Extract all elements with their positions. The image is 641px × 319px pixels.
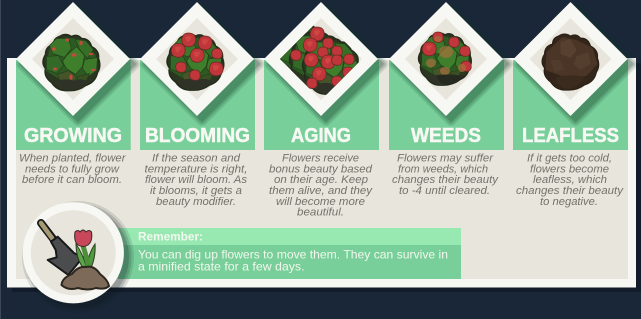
callout heading: Remember: [138,230,203,244]
card: leafless [514,2,628,208]
icon: shovel and tulip badge [23,202,124,303]
text: blooming: flower will bloom. As [145,174,248,186]
circle shadow [22,201,134,313]
diamond frame: leafless [514,2,628,116]
text: aging: beautiful. [297,207,344,219]
text: growing: When planted, flower [19,152,127,164]
panel: main card [7,58,641,292]
heading: growing: GROWING [24,125,122,147]
text: blooming: it blooms, it gets a [150,185,242,197]
text: aging: Flowers receive [282,152,359,164]
text: leafless [516,152,625,208]
heading: blooming: BLOOMING [145,125,250,147]
text: growing [19,152,127,186]
text: weeds: changes their beauty [392,174,500,186]
text: blooming: beauty modifier. [156,196,236,208]
icon: blooming bush [167,33,224,90]
heading: weeds: WEEDS [411,125,481,147]
text: blooming: temperature is right, [144,163,248,175]
diamond frame: weeds [389,2,503,116]
text: blooming: If the season and [152,152,241,164]
text: weeds: to -4 until cleared. [399,185,490,197]
text: leafless: to negative. [540,196,598,208]
heading: aging: AGING [291,125,351,147]
callout text: a minified state for a few days. [138,260,304,274]
tulip [75,230,95,270]
text: aging: will become more [276,196,365,208]
text: aging: on their age. Keep [274,174,368,186]
shovel [41,223,83,275]
diamond shadows [21,7,632,121]
text: weeds: Flowers may suffer [397,152,494,164]
left edge line [0,0,1,319]
text: leafless: If it gets too cold, [527,152,612,164]
text: leafless: leafless, which [533,174,607,186]
dirt mound [62,267,109,290]
callout text [138,248,448,274]
text: blooming [144,152,248,208]
text: aging: them alive, and they [269,185,374,197]
card: weeds [389,2,503,197]
panel: green column headers [16,60,628,150]
heading: leafless: LEAFLESS [522,125,619,147]
diamond frame: aging [264,2,378,116]
diamond frame: blooming [140,2,254,116]
diamond frame: growing [16,2,130,116]
text: growing: needs to fully grow [25,163,120,175]
icon: leafless bush [542,34,599,90]
icon: weeds bush [418,32,471,85]
icon: growing bush [43,34,100,91]
text: aging [269,152,374,219]
card: aging [264,2,378,219]
icon: aging bush [276,24,359,94]
card: growing [16,2,130,186]
text: weeds [392,152,500,197]
card: blooming [140,2,254,208]
text: aging: bonus beauty based [269,163,373,175]
callout text: You can dig up flowers to move them. They can survive in [138,248,448,262]
callout: remember [118,228,461,279]
text: leafless: changes their beauty [516,185,625,197]
text: leafless: flowers become [530,163,609,175]
text: growing: before it can bloom. [22,174,122,186]
text: weeds: from weeds, which [398,163,488,175]
